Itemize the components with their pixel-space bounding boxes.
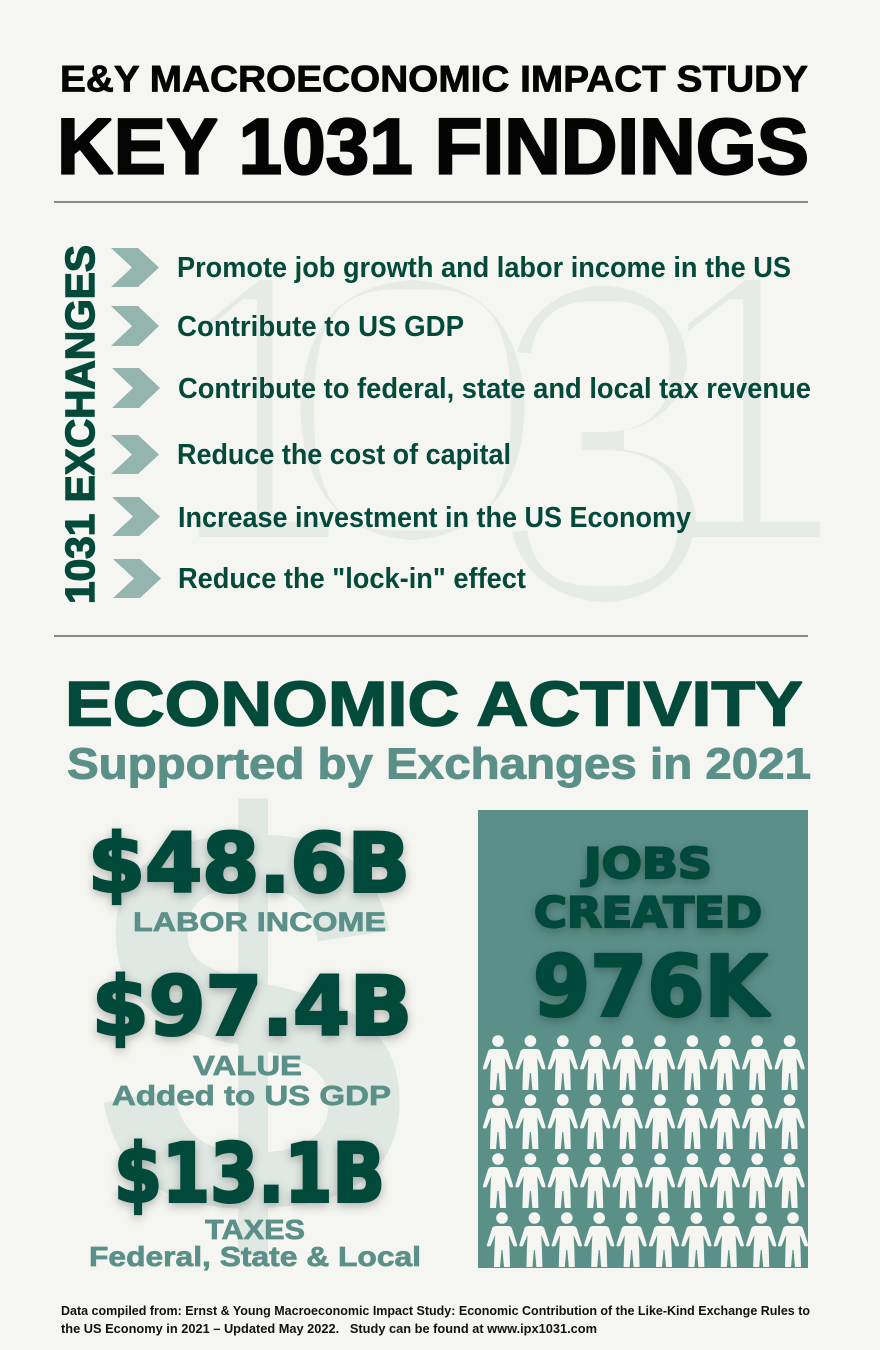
benefit 5: Increase investment in the US Economy	[178, 502, 691, 534]
watermark: dollar sign: $	[96, 707, 407, 1333]
stat: value added to GDP	[92, 960, 412, 1111]
footer: source note	[61, 1304, 810, 1336]
footer: source note: the US Economy in 2021 – Updated May 2022. Study can be found at www.ipx1031.com	[61, 1322, 597, 1336]
list: 1031 exchange benefits	[111, 248, 811, 598]
watermark: 1031	[166, 178, 844, 707]
arrow 6	[113, 559, 161, 598]
jobs heading: JOBS	[581, 839, 712, 888]
benefit 6: Reduce the "lock-in" effect	[178, 563, 526, 595]
watermark: 1031: 1	[647, 189, 844, 628]
stat: taxes	[89, 1128, 421, 1272]
people icons	[483, 1035, 808, 1267]
panel: jobs created	[478, 810, 808, 1268]
arrow 1	[111, 248, 159, 287]
title: key findings: KEY 1031 FINDINGS	[57, 102, 809, 190]
stat: taxes: Federal, State & Local	[89, 1241, 421, 1272]
vertical heading: 1031 EXCHANGES	[57, 245, 103, 604]
stat: value added to GDP: VALUE	[193, 1050, 302, 1081]
stat: labor income: LABOR INCOME	[133, 907, 386, 937]
watermark: 1031: 3	[481, 178, 726, 707]
watermark: 1031: 0	[262, 189, 563, 630]
benefit 4: Reduce the cost of capital	[177, 439, 511, 471]
arrow 5	[112, 497, 160, 536]
stat: value added to GDP: $97.4B	[92, 960, 412, 1054]
arrow 4	[111, 435, 159, 474]
jobs number: 976K	[533, 938, 771, 1036]
panel: jobs created: CREATED	[534, 888, 762, 937]
footer: source note: Data compiled from: Ernst & Young Macroeconomic Impact Study: Economic Contribution of the Like-Kind Exchange Rules to	[61, 1304, 810, 1318]
watermark: 1031: 1	[166, 188, 352, 628]
title: study name: E&Y MACROECONOMIC IMPACT STUDY	[60, 58, 808, 100]
benefit 2: Contribute to US GDP	[177, 311, 464, 343]
subheading: Supported by Exchanges in 2021	[67, 740, 811, 788]
arrow 2	[111, 306, 159, 346]
benefit 3: Contribute to federal, state and local tax revenue	[178, 373, 811, 405]
benefit 1: Promote job growth and labor income in the US	[177, 252, 791, 284]
arrow 3	[112, 368, 160, 408]
stat: taxes: $13.1B	[114, 1128, 385, 1222]
stat: labor income: $48.6B	[88, 818, 410, 912]
heading: economic activity: ECONOMIC ACTIVITY	[65, 670, 803, 740]
stat: taxes: TAXES	[205, 1214, 305, 1245]
stat: value added to GDP: Added to US GDP	[112, 1080, 391, 1111]
